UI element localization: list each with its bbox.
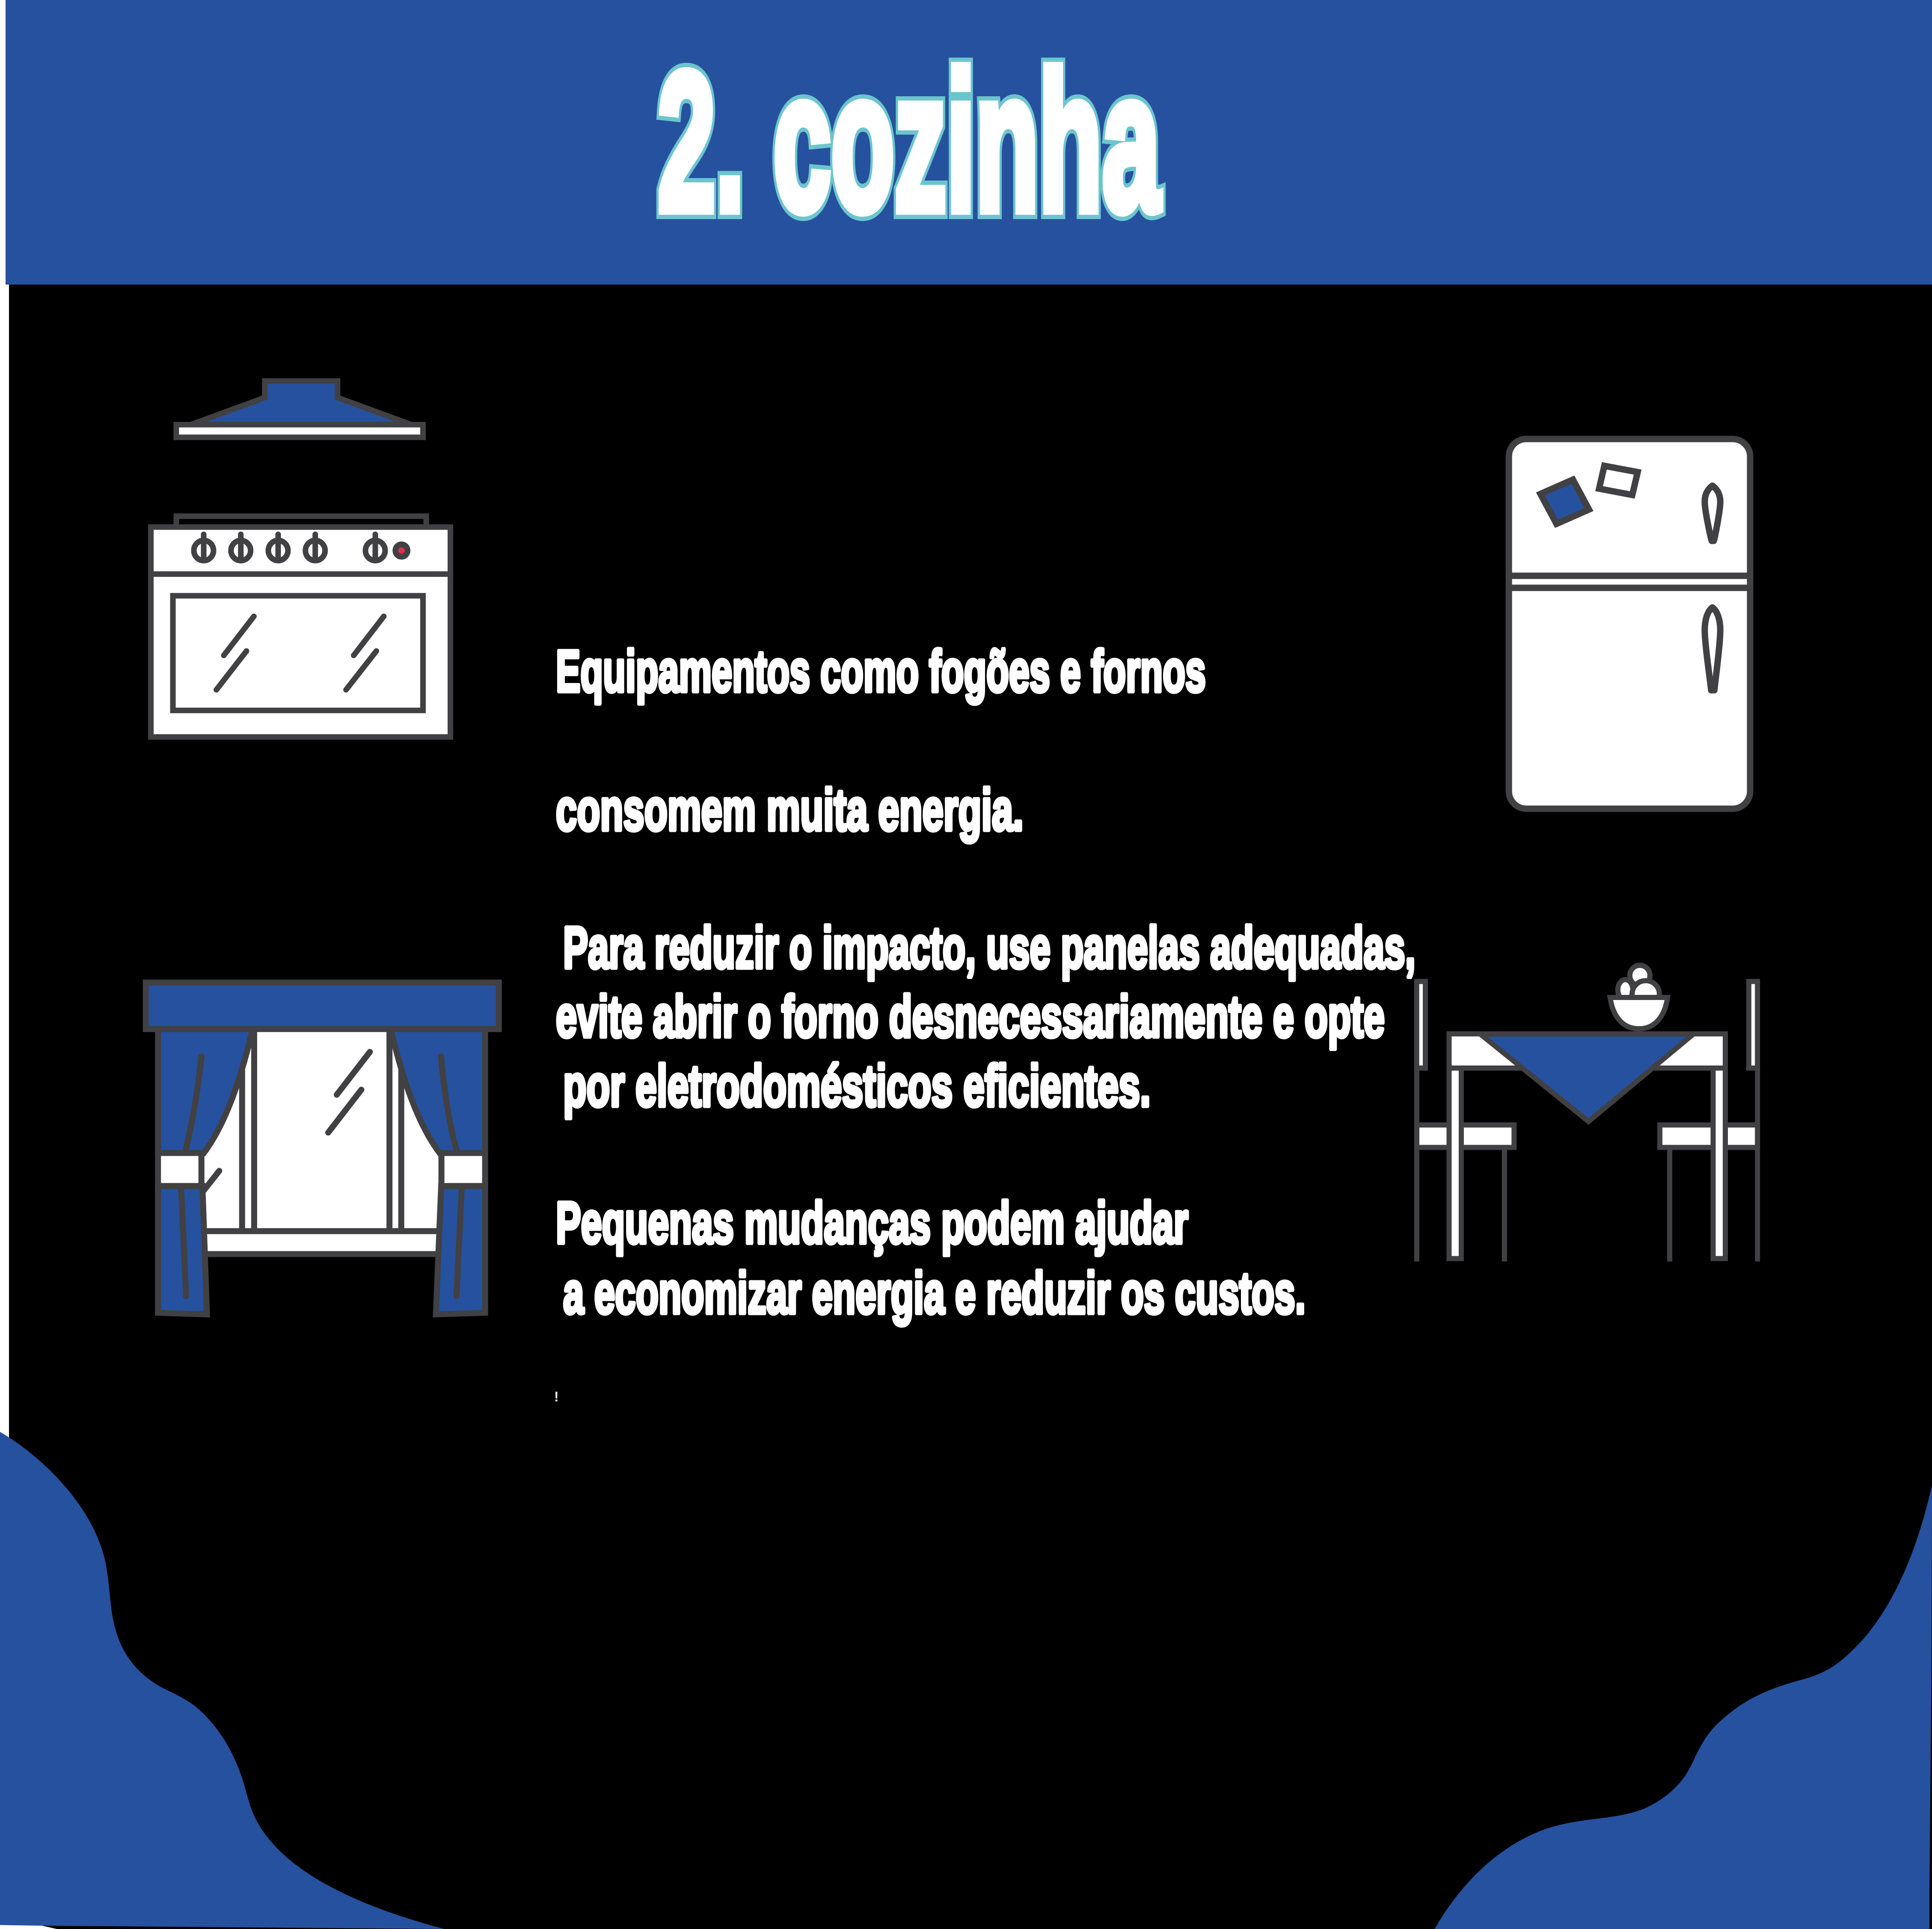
chair: left (1417, 982, 1514, 1261)
table (1449, 1034, 1725, 1258)
paragraph 1 (556, 638, 1206, 843)
title: 2. cozinha (658, 32, 1161, 252)
paragraph 3: a economizar energia e reduzir os custos. (563, 1260, 1306, 1326)
fruit bowl (1610, 965, 1668, 1029)
icon: refrigerator (1509, 439, 1750, 809)
title (658, 32, 1161, 252)
paragraph 2: por eletrodomésticos eficientes. (563, 1053, 1151, 1119)
paragraph 2 (556, 915, 1416, 1119)
paragraph 1: Equipamentos como fogões e fornos (556, 638, 1206, 704)
blob: bottom right (1435, 1485, 1932, 1929)
fridge magnets (1540, 466, 1638, 524)
paragraph 2: Para reduzir o impacto, use panelas adequadas, (563, 915, 1416, 981)
curtain: right (391, 1029, 485, 1315)
stove knobs (194, 534, 410, 561)
oven glass reflections (217, 616, 384, 690)
paragraph 2: evite abrir o forno desnecessariamente e opte (556, 984, 1385, 1050)
body text (554, 638, 1416, 1404)
icon: dining table with chairs (1417, 965, 1757, 1261)
paragraph 3 (556, 1190, 1306, 1326)
fridge handles (1705, 486, 1720, 690)
chair: right (1660, 982, 1757, 1261)
icon: window with curtains (146, 982, 499, 1315)
stray exclamation mark: ! (554, 1389, 559, 1404)
icon: range hood (176, 381, 423, 437)
header band (6, 0, 1932, 285)
title: 2. cozinha (658, 32, 1161, 252)
paragraph 3: Pequenas mudanças podem ajudar (556, 1190, 1188, 1256)
blob: bottom left (0, 1432, 444, 1929)
paragraph 1: consomem muita energia. (556, 777, 1024, 843)
curtain: left (158, 1029, 252, 1315)
icon: stove and oven (151, 516, 451, 737)
curtain valance (146, 982, 499, 1029)
